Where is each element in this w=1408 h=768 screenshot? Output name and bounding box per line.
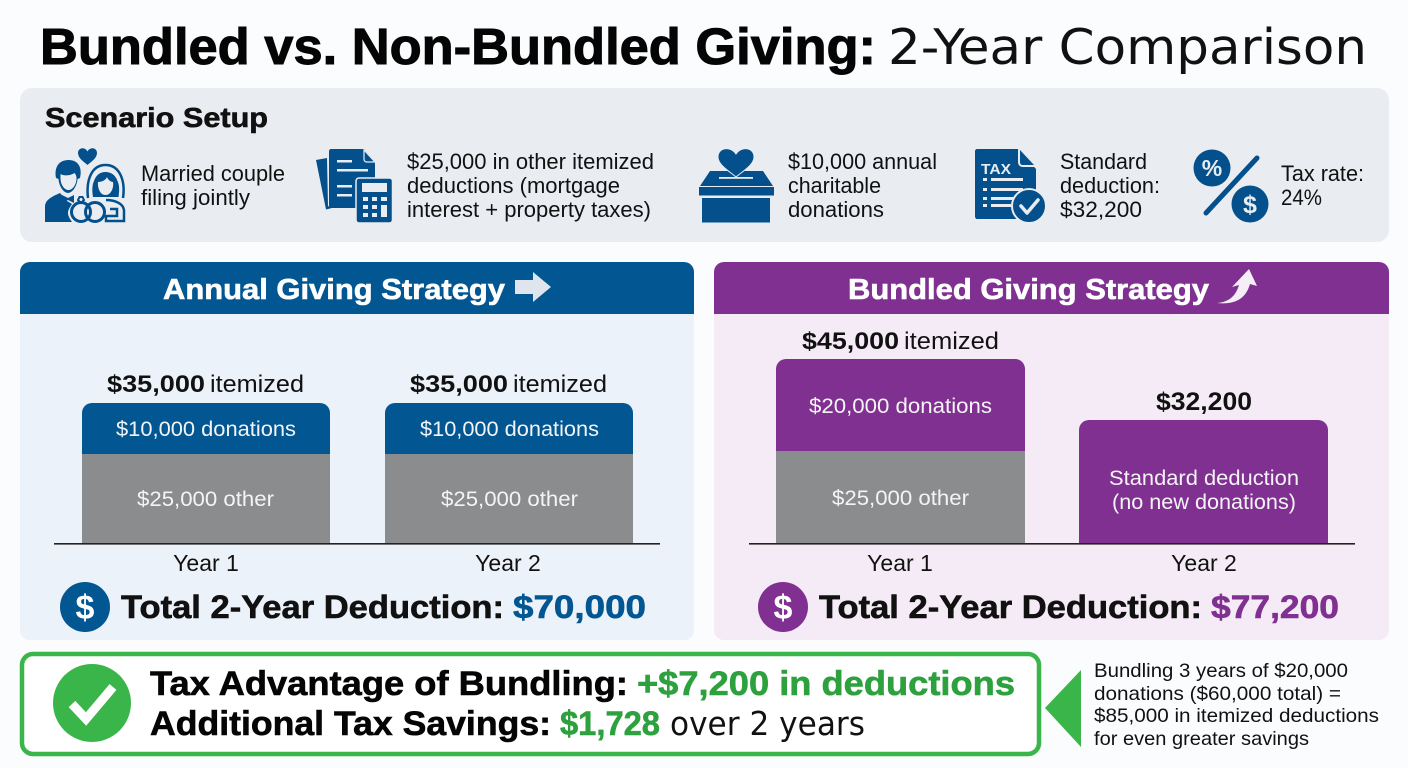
text: annual donations: donations — [788, 197, 884, 222]
axis labels: annual: Year 2 — [475, 550, 541, 576]
text: tax advantage: Tax Advantage of Bundling: — [150, 665, 628, 703]
text: married couple — [141, 161, 285, 210]
text: tax advantage — [150, 665, 1015, 703]
label: annual year 1 total — [107, 371, 304, 398]
icon: percent and dollar: $ — [1243, 191, 1257, 219]
label: annual year 1 total: itemized — [210, 371, 304, 398]
panel header: annual — [20, 262, 694, 314]
label: annual year 2 total: $35,000 — [410, 371, 508, 398]
label: bundled year 2 total: $32,200 — [1156, 388, 1252, 416]
icon: dollar coin purple: $ — [774, 589, 793, 627]
icon: dollar coin blue — [60, 582, 110, 632]
text: standard deduction — [1060, 149, 1160, 222]
total: bundled — [819, 589, 1339, 625]
bar: bundled year 1: $20,000 donations — [809, 395, 992, 418]
total: annual — [121, 589, 646, 625]
total: annual: $70,000 — [513, 589, 646, 625]
text: three-year bundling note: $85,000 in itemized deductions — [1094, 705, 1379, 727]
icon: documents and calculator — [316, 149, 392, 223]
callout: tax advantage — [22, 654, 1039, 754]
total: annual: Total 2-Year Deduction: — [121, 589, 504, 625]
icon: right arrow — [515, 272, 551, 302]
icon: dollar coin blue: $ — [76, 589, 95, 627]
panel: scenario setup — [20, 88, 1389, 242]
text: married couple: Married couple — [141, 161, 285, 186]
panel header: bundled: Bundled Giving Strategy — [848, 274, 1209, 306]
bar: annual year 1 — [82, 403, 330, 543]
bar: annual year 1: $10,000 donations — [116, 418, 296, 441]
bar: annual year 2: $10,000 donations — [420, 418, 599, 441]
text: tax rate — [1281, 161, 1364, 210]
bar: bundled year 2: Standard deduction — [1109, 467, 1299, 490]
icon: tax form — [975, 149, 1046, 223]
text: tax savings: $1,728 — [560, 705, 660, 743]
label: bundled year 1 total: itemized — [904, 328, 999, 355]
text: three-year bundling note: donations ($60,000 total) = — [1094, 683, 1341, 705]
icon: up curved arrow — [1217, 269, 1257, 303]
text: three-year bundling note: for even greater savings — [1094, 728, 1309, 750]
axis labels: bundled: Year 1 — [867, 550, 933, 576]
axis labels: bundled: Year 2 — [1171, 550, 1237, 576]
text: married couple: filing jointly — [141, 185, 250, 210]
total: bundled: $77,200 — [1211, 589, 1339, 625]
text: tax savings: Additional Tax Savings: — [150, 705, 551, 743]
bar: bundled year 2 — [1079, 420, 1328, 543]
chart: annual giving bars — [54, 371, 660, 576]
bar: annual year 2: $25,000 other — [441, 488, 578, 511]
arrow: pointing to callout — [1045, 670, 1081, 747]
icon: percent and dollar: % — [1202, 155, 1222, 181]
label: annual year 1 total: $35,000 — [107, 371, 205, 398]
axis labels: bundled — [867, 550, 1237, 576]
icon: tax form: TAX — [981, 161, 1011, 178]
icon: percent and dollar — [1194, 150, 1268, 222]
text: tax rate: 24% — [1281, 185, 1322, 210]
text: annual donations — [788, 149, 937, 222]
bar: bundled year 2: (no new donations) — [1112, 491, 1296, 514]
axis labels: annual: Year 1 — [173, 550, 239, 576]
label: bundled year 1 total — [802, 328, 999, 355]
bar: annual year 2 — [385, 403, 633, 543]
text: other itemized deductions: $25,000 in other itemized — [407, 149, 654, 174]
text: other itemized deductions: deductions (mortgage — [407, 173, 620, 198]
axis labels: annual — [173, 550, 541, 576]
bar: bundled year 1 — [776, 359, 1025, 543]
panel header: bundled — [714, 262, 1389, 314]
text: tax rate: Tax rate: — [1281, 161, 1364, 186]
text: three-year bundling note — [1094, 660, 1379, 750]
icon: dollar coin purple — [758, 582, 808, 632]
text: standard deduction: deduction: — [1060, 173, 1160, 198]
bar: bundled year 1: $25,000 other — [832, 487, 969, 510]
total: bundled: Total 2-Year Deduction: — [819, 589, 1202, 625]
icon: married couple — [45, 148, 124, 222]
text: annual donations: charitable — [788, 173, 881, 198]
text: standard deduction: Standard — [1060, 149, 1147, 174]
title: 2-Year Comparison — [888, 19, 1367, 76]
panel: bundled giving strategy — [714, 262, 1389, 640]
label: annual year 2 total: itemized — [513, 371, 607, 398]
text: standard deduction: $32,200 — [1060, 197, 1142, 222]
text: annual donations: $10,000 annual — [788, 149, 937, 174]
chart: bundled giving bars — [749, 328, 1355, 576]
title: Bundled vs. Non-Bundled Giving: — [40, 18, 876, 75]
text: tax advantage: +$7,200 in deductions — [637, 665, 1015, 703]
panel: annual giving strategy — [20, 262, 694, 640]
text: other itemized deductions: interest + property taxes) — [407, 197, 651, 222]
text: three-year bundling note: Bundling 3 years of $20,000 — [1094, 660, 1348, 682]
heading: scenario setup: Scenario Setup — [45, 102, 268, 133]
text: tax savings — [150, 704, 865, 743]
icon: donation box — [699, 149, 774, 222]
text: tax savings: over 2 years — [670, 704, 865, 743]
text: other itemized deductions — [407, 149, 654, 222]
panel header: annual: Annual Giving Strategy — [163, 274, 505, 306]
title — [40, 18, 1367, 76]
icon: green check — [53, 664, 131, 742]
label: annual year 2 total — [410, 371, 607, 398]
bar: annual year 1: $25,000 other — [137, 488, 274, 511]
label: bundled year 1 total: $45,000 — [802, 328, 899, 355]
